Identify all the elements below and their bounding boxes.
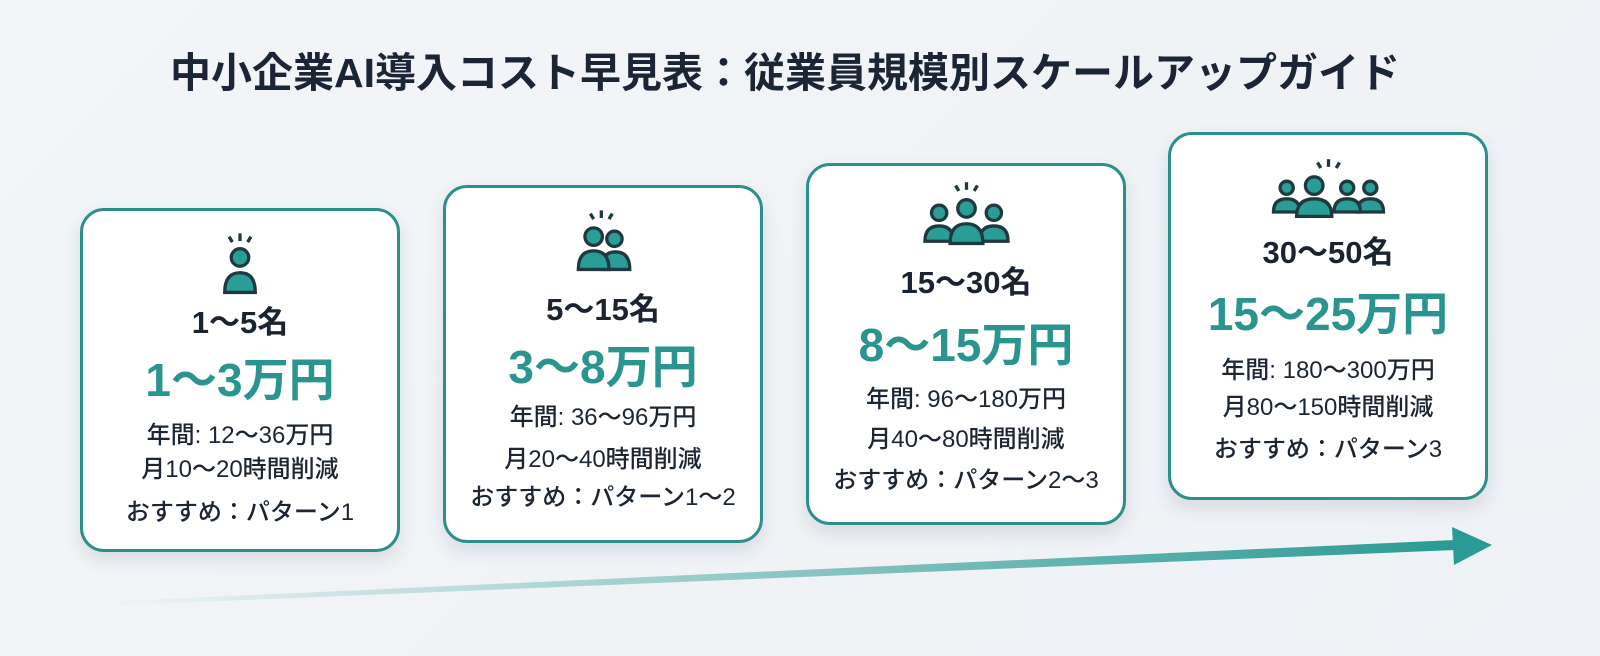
card 1: 1〜3万円	[145, 354, 335, 406]
card 1: 月10〜20時間削減	[141, 456, 339, 483]
card 4: 30〜50名	[1263, 235, 1393, 270]
card 3: おすすめ：パターン2〜3	[833, 467, 1099, 494]
title: 中小企業AI導入コスト早見表：従業員規模別スケールアップガイド	[170, 50, 1400, 96]
icon: four people	[1272, 159, 1386, 218]
icon: person	[223, 233, 257, 294]
card 3: 月40〜80時間削減	[867, 426, 1065, 453]
card 3: 8〜15万円	[859, 319, 1073, 371]
card 4: 15〜25万円	[1208, 288, 1448, 340]
card 1: おすすめ：パターン1	[126, 499, 354, 526]
card 4	[1168, 132, 1488, 500]
card 1: 年間: 12〜36万円	[147, 422, 333, 449]
card 4: 年間: 180〜300万円	[1221, 357, 1435, 384]
card 3	[806, 163, 1126, 525]
card 2: 3〜8万円	[508, 341, 698, 393]
card 3: 年間: 96〜180万円	[866, 386, 1066, 413]
card 2: 5〜15名	[546, 292, 660, 327]
card 4: おすすめ：パターン3	[1214, 436, 1442, 463]
card 4: 月80〜150時間削減	[1223, 394, 1433, 421]
icon: two people	[576, 210, 632, 272]
card 1: 1〜5名	[192, 305, 288, 340]
card 2: 年間: 36〜96万円	[510, 404, 696, 431]
icon: three people	[923, 182, 1010, 246]
card 3: 15〜30名	[901, 265, 1031, 300]
card 2: 月20〜40時間削減	[504, 446, 702, 473]
card 1	[80, 208, 400, 552]
card 2	[443, 185, 763, 543]
card 2: おすすめ：パターン1〜2	[470, 484, 736, 511]
